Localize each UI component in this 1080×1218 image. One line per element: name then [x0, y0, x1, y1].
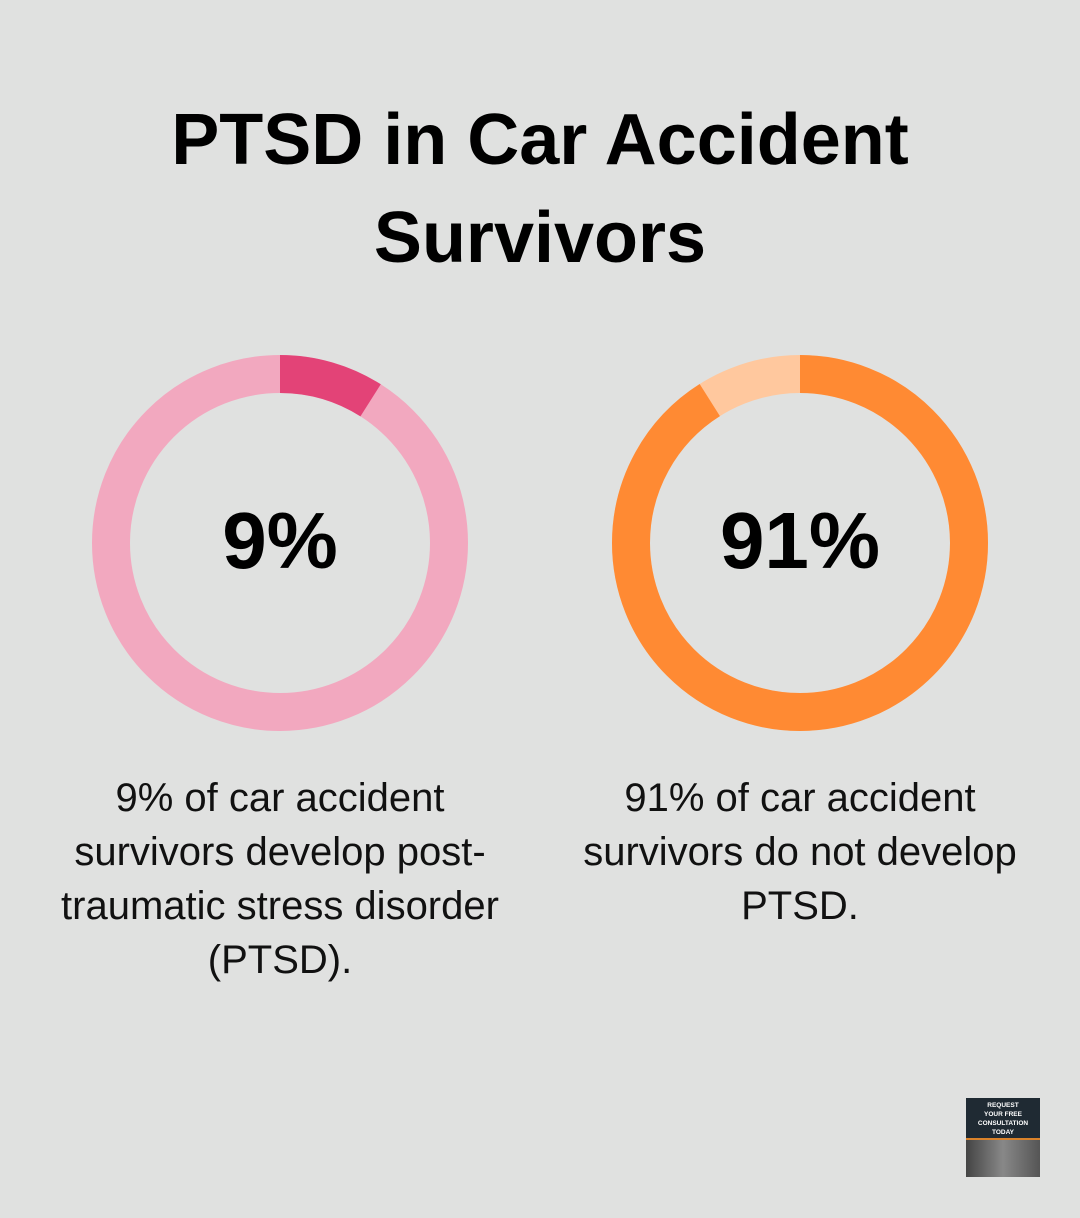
text: left description: (PTSD). [208, 938, 352, 982]
donut chart: 91% [612, 355, 988, 731]
text: left description: 9% of car accident [115, 776, 445, 820]
text: right description: survivors do not develop [583, 830, 1017, 874]
text: right description: 91% of car accident [624, 776, 976, 820]
title [171, 100, 909, 278]
text: right description [583, 776, 1017, 928]
text: left description: traumatic stress disorder [61, 884, 499, 928]
donut chart: 9%: 9% [222, 496, 338, 585]
donut chart: 9% [92, 355, 468, 731]
title: Survivors [374, 198, 706, 278]
logo: consultation badge [966, 1098, 1040, 1177]
text: right description: PTSD. [741, 884, 859, 928]
logo: consultation badge: YOUR FREE [984, 1111, 1022, 1118]
text: left description [61, 776, 499, 982]
donut chart: 91%: 91% [720, 496, 880, 585]
title: PTSD in Car Accident [171, 100, 909, 180]
logo: consultation badge: TODAY [992, 1129, 1014, 1136]
logo: consultation badge: REQUEST [987, 1102, 1019, 1109]
text: left description: survivors develop post- [74, 830, 486, 874]
logo: consultation badge: CONSULTATION [978, 1120, 1028, 1127]
